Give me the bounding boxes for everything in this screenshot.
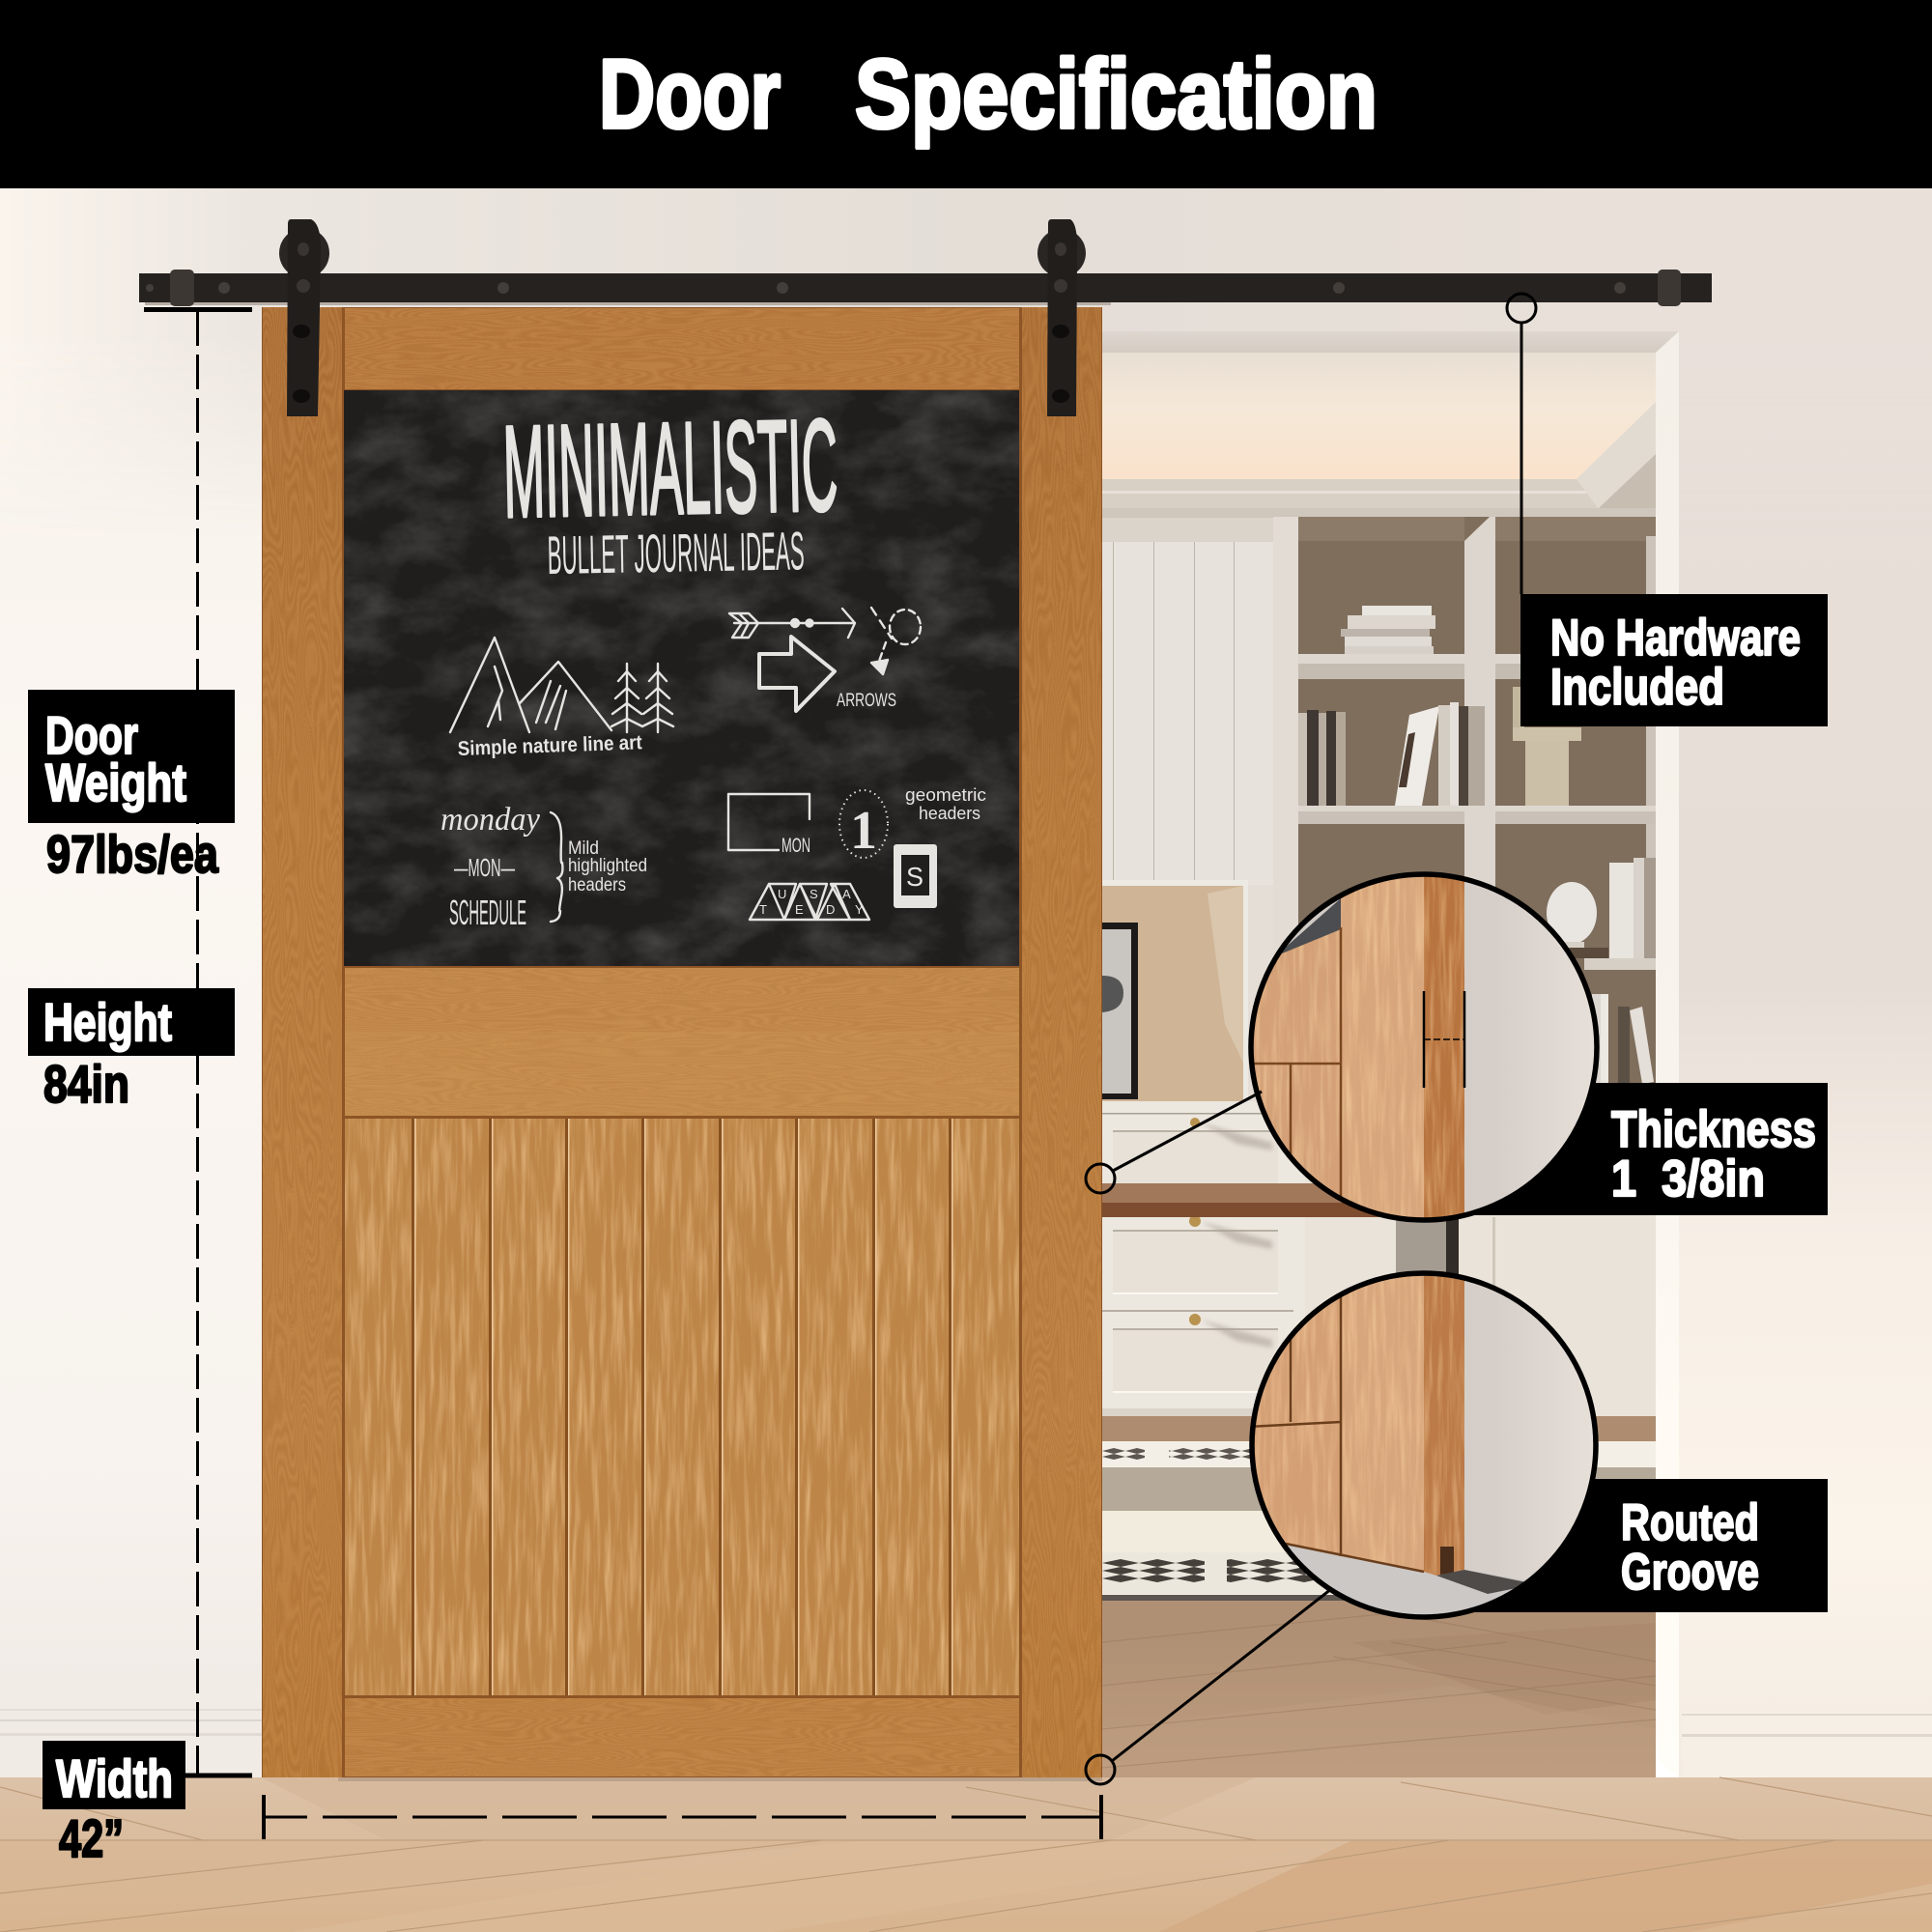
chalkboard: BULLET JOURNAL IDEAS	[547, 520, 805, 585]
title	[599, 41, 1378, 149]
chalk header samples: SCHEDULE	[449, 893, 526, 932]
chalk geometric headers: Y	[855, 902, 864, 917]
label: routed groove	[1621, 1494, 1759, 1601]
room behind door	[1102, 331, 1679, 1777]
herringbone inside room	[1102, 1613, 1656, 1777]
books: leaning and upright right	[1395, 702, 1485, 806]
lower wall and cabinets	[1102, 1101, 1656, 1416]
value: width: 42”	[59, 1808, 124, 1868]
artwork	[1102, 880, 1248, 1107]
label: thickness: 1 3/8in	[1611, 1151, 1765, 1208]
chalk header samples: headers	[568, 875, 626, 895]
label: no hardware: Included	[1550, 659, 1724, 716]
chalk arrows	[729, 608, 921, 711]
label: no hardware: No Hardware	[1550, 610, 1801, 667]
hanger: right	[1037, 219, 1086, 416]
label: door weight	[28, 690, 235, 823]
label box: routed groove	[1449, 1479, 1828, 1612]
chalkboard: MINIMALISTIC	[501, 392, 839, 545]
wall: left	[0, 188, 1102, 1777]
barn door	[262, 307, 1102, 1777]
sculpture	[1513, 687, 1581, 806]
callout line and marker: groove	[1086, 1589, 1331, 1784]
rug	[1102, 1441, 1656, 1601]
label: routed groove: Routed	[1621, 1494, 1759, 1551]
middle rail	[345, 968, 1019, 1116]
title: Specification	[855, 41, 1378, 149]
left stile	[263, 307, 342, 1777]
detail circle: thickness	[1246, 869, 1604, 1227]
chalk geometric headers	[728, 785, 986, 920]
vertical planks	[345, 1119, 1019, 1695]
wall: upper strip	[151, 188, 1679, 423]
desk top	[1102, 1183, 1411, 1217]
chalk geometric headers: MON	[781, 835, 810, 857]
chalk caption: arrows: ARROWS	[837, 691, 896, 711]
label: height: Height	[43, 992, 172, 1052]
label: thickness	[1611, 1101, 1816, 1208]
thickness dimension mark	[1424, 991, 1464, 1088]
back wall	[1102, 331, 1656, 1608]
books: stacked	[1341, 606, 1435, 654]
title: Door	[599, 41, 781, 149]
chalk geometric headers: geometric	[905, 785, 986, 805]
top rail	[345, 308, 1019, 389]
callout line and marker: thickness	[1086, 1092, 1262, 1193]
rail bolts	[146, 282, 1626, 294]
chalk geometric headers: 1	[850, 801, 877, 861]
wall: right	[1679, 188, 1932, 1777]
chalk header samples: monday	[440, 802, 541, 838]
bookshelf	[1273, 517, 1656, 1116]
chalk geometric headers: S	[906, 862, 923, 892]
room floor	[1102, 1416, 1656, 1777]
chalkboard	[344, 390, 1019, 966]
value: door weight: 97lbs/ea	[46, 824, 218, 884]
label: thickness: Thickness	[1611, 1101, 1816, 1158]
label: width: Width	[56, 1748, 173, 1808]
detail circle: routed groove	[1246, 1265, 1604, 1623]
height dimension line	[144, 309, 252, 1776]
chalk geometric headers: E	[795, 902, 804, 917]
callout line and marker: hardware	[1507, 294, 1536, 594]
width dimension line	[264, 1795, 1101, 1839]
label: door weight: Door	[45, 705, 138, 765]
wall panelling	[1102, 518, 1276, 885]
label: routed groove: Groove	[1621, 1544, 1759, 1601]
door jamb	[1656, 331, 1679, 1777]
baseboard: right	[1682, 1712, 1932, 1777]
chalk caption: nature: Simple nature line art	[457, 731, 642, 760]
label: no hardware	[1520, 594, 1828, 726]
vase and books on third shelf	[1547, 858, 1656, 1084]
rail stops	[170, 270, 194, 306]
main floor	[0, 1777, 1932, 1932]
chalk geometric headers: T	[759, 902, 767, 917]
chalk header samples: highlighted	[568, 856, 647, 876]
chalk geometric headers: U	[778, 887, 786, 901]
value: height: 84in	[43, 1054, 129, 1114]
books: upright left	[1298, 710, 1346, 806]
baseboard: left	[0, 1709, 263, 1777]
chalk geometric headers: S	[810, 887, 818, 901]
barn rail	[139, 270, 1712, 306]
chalk geometric headers: A	[842, 887, 851, 901]
title banner	[0, 0, 1932, 188]
chalk mountains	[450, 638, 673, 732]
lintel	[1102, 331, 1679, 353]
cornice	[1102, 402, 1656, 518]
right stile	[1022, 307, 1101, 1777]
chalk header samples: Mild	[568, 838, 599, 859]
ceiling glow	[1102, 353, 1656, 479]
chalk header samples: —MON—	[454, 853, 515, 882]
chalk geometric headers: D	[826, 902, 835, 917]
chalk geometric headers: headers	[919, 804, 980, 823]
chalk header samples	[440, 802, 647, 932]
label: door weight: Weight	[45, 753, 186, 812]
label box: thickness	[1449, 1083, 1828, 1215]
hanger: left	[279, 219, 329, 416]
bottom rail	[345, 1698, 1019, 1776]
